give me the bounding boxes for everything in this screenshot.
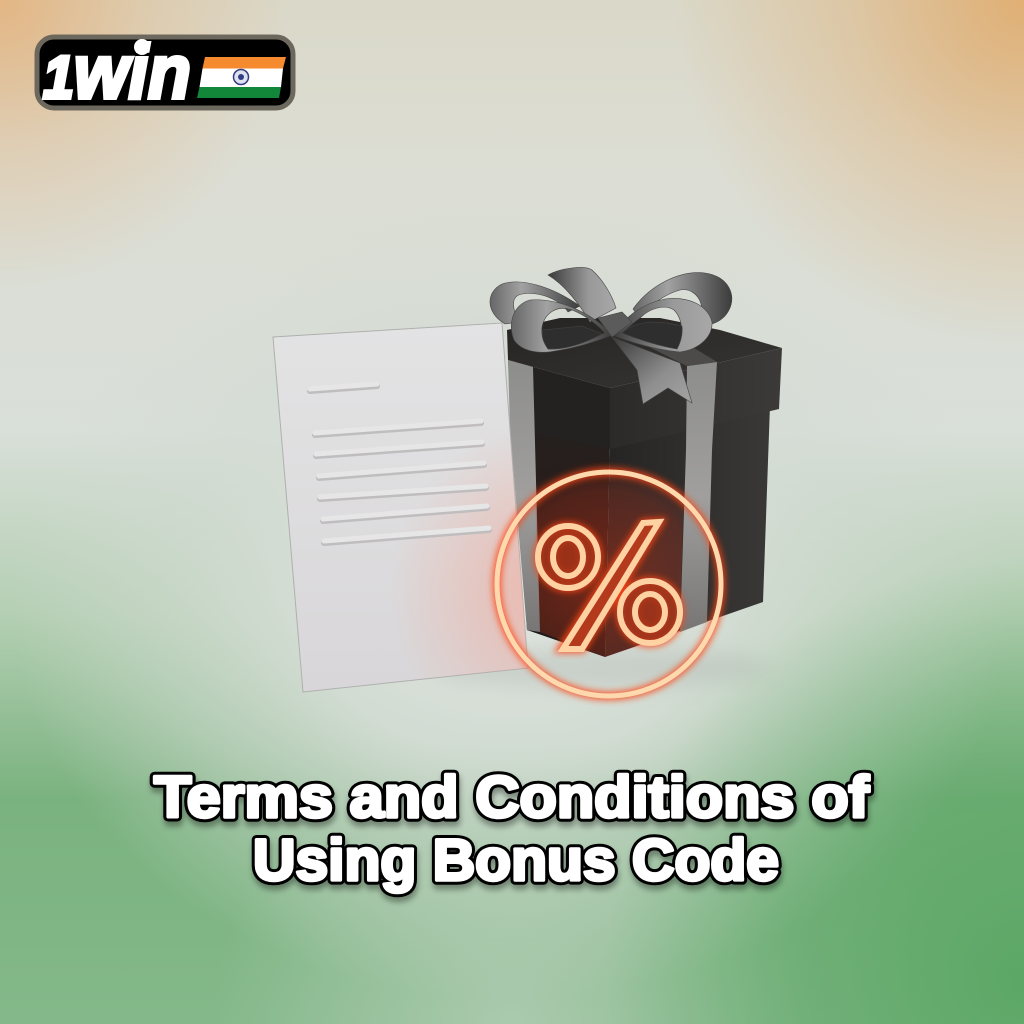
- bow tail: [612, 337, 692, 404]
- title outline and shadow: [154, 765, 870, 893]
- right vertical ribbon: [680, 362, 717, 632]
- neon percent badge: [497, 472, 721, 696]
- neon tint on box: [533, 440, 685, 657]
- title outline and shadow: Using Bonus Code: [253, 828, 779, 893]
- ribbon across lid: [645, 332, 717, 366]
- logo flag: [197, 57, 286, 98]
- front right loop: [612, 298, 712, 352]
- front right loop interior: [622, 322, 682, 349]
- back right loop: [633, 273, 732, 324]
- box lid right side: [610, 348, 782, 449]
- box right face: [605, 405, 770, 657]
- bow knot: [598, 312, 632, 337]
- bow: [490, 268, 732, 404]
- title fill: Terms and Conditions of: [154, 765, 870, 830]
- title fill: Using Bonus Code: [253, 828, 779, 893]
- box lid top: [507, 318, 782, 388]
- title: [154, 765, 870, 893]
- title outline and shadow: Terms and Conditions of: [154, 765, 870, 830]
- box lid left side: [508, 360, 610, 449]
- gift box: [490, 268, 782, 657]
- left vertical ribbon: [508, 360, 540, 632]
- floor shadow: [430, 648, 770, 688]
- paper sheet: [273, 323, 528, 692]
- tall back loop: [548, 268, 616, 322]
- neon glow: [497, 472, 721, 696]
- box left face: [513, 400, 610, 657]
- neon ring: [497, 472, 721, 696]
- logo wordmark: 1win: [43, 30, 191, 115]
- percent sign: [538, 522, 680, 649]
- logo: 1win India: [37, 30, 293, 115]
- paper neon reflection: [273, 323, 528, 692]
- front left loop: [511, 300, 612, 352]
- document: [273, 323, 528, 692]
- title fill: [154, 765, 870, 893]
- front left loop interior: [542, 326, 602, 349]
- back left loop: [490, 282, 580, 324]
- embossed text lines: [310, 384, 489, 543]
